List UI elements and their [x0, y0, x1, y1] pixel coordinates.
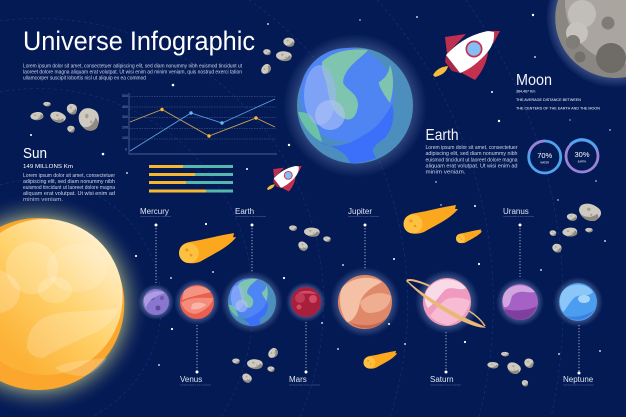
rocket: small: [267, 166, 302, 192]
planet labels: Mars: [289, 375, 307, 384]
intro text: laoreet dolore magna aliquam erat volutpat. Ut wisi enim ad minim veniam, quis nostrud exerci tation: [23, 70, 242, 76]
connector lines: [156, 225, 579, 373]
rocket: large: [433, 31, 500, 80]
intro text: Lorem ipsum dolor sit amet, consectetuer adipiscing elit, sed diam nonummy nibh euismod tincidunt ut: [23, 64, 243, 70]
sun text: aliquam erat volutpat. Ut wisi enim ad: [23, 191, 115, 197]
sun text: Sun: [23, 146, 47, 162]
earth text: Lorem ipsum dolor sit amet, consectetuer: [426, 145, 518, 151]
title: Universe Infographic: [23, 26, 255, 56]
earth text: minim veniam.: [426, 170, 466, 176]
planet labels: Jupiter: [348, 207, 372, 216]
planet: mercury: [138, 284, 174, 320]
planet labels: Lorem ipsum dolor sit amet, consectetuer: [140, 215, 171, 218]
planet labels: Venus: [180, 375, 202, 384]
planet labels: Uranus: [503, 207, 529, 216]
moon text: THE AVERAGE DISTANCE BETWEEN: [516, 98, 581, 102]
earth text: euismod tincidunt ut laoreet dolore magna: [426, 158, 518, 164]
planet: venus: [174, 279, 220, 325]
planet labels: Mercury: [140, 207, 169, 216]
donut: 30 percent earth: [566, 140, 598, 172]
earth text: Earth: [426, 127, 458, 144]
planet labels: Neptune: [563, 375, 594, 384]
planet: jupiter: [330, 267, 400, 337]
asteroids: upper right: [550, 201, 604, 253]
planet: neptune: [553, 277, 603, 327]
earth text: adipiscing elit, sed diam nonummy nibh: [426, 151, 518, 157]
line chart: 200: [122, 126, 128, 130]
planet labels: Lorem ipsum dolor sit amet, consectetuer: [430, 384, 461, 386]
sun text: adipiscing elit, sed diam nonummy nibh: [23, 179, 115, 185]
planet labels: Saturn: [430, 375, 454, 384]
asteroids: middle: [289, 225, 331, 252]
asteroids: lower right: [487, 352, 534, 386]
planet: mars: [286, 282, 326, 322]
donut: 30 percent earth: EARTH: [578, 160, 586, 164]
earth text: [426, 127, 518, 176]
line chart: 0: [125, 148, 127, 152]
earth text: aliquam erat volutpat. Ut wisi enim ad: [426, 164, 518, 170]
sun text: Lorem ipsum dolor sit amet, consectetuer: [23, 173, 115, 179]
planet labels: Earth: [235, 207, 254, 216]
moon text: Moon: [516, 72, 552, 89]
donut: 70 percent water: [529, 141, 561, 173]
asteroids: lower middle: [232, 346, 279, 384]
bar chart: [149, 165, 233, 192]
intro text: ullamcorper suscipit lobortis nisl ut aliquip ex ea commod: [23, 76, 146, 82]
donut: 70 percent water: WATER: [540, 162, 549, 164]
donut: 70 percent water: 70%: [537, 151, 553, 160]
moon text: 384,467 Km: [516, 90, 535, 94]
asteroids: left: [29, 102, 99, 133]
sun text: minim veniam.: [23, 197, 63, 203]
planet: uranus: [496, 278, 544, 326]
line chart: [122, 93, 277, 154]
asteroids: top: [260, 38, 294, 76]
sun text: euismod tincidunt ut laoreet dolore magna: [23, 185, 115, 191]
planet labels: Lorem ipsum dolor sit amet, consectetuer: [180, 384, 211, 386]
big earth: [283, 34, 427, 178]
planet labels: Lorem ipsum dolor sit amet, consectetuer: [563, 384, 594, 386]
planet labels: Lorem ipsum dolor sit amet, consectetuer: [503, 215, 534, 218]
moon text: THE CENTERS OF THE EARTH AND THE MOON: [516, 106, 600, 110]
planet labels: Lorem ipsum dolor sit amet, consectetuer: [348, 215, 379, 218]
planet labels: Lorem ipsum dolor sit amet, consectetuer: [235, 215, 266, 218]
planet: saturn: [407, 270, 485, 334]
moon: [547, 0, 626, 88]
line chart: 400: [122, 105, 128, 109]
line chart: 500: [122, 94, 128, 98]
planet labels: Lorem ipsum dolor sit amet, consectetuer: [289, 384, 320, 386]
donut: 30 percent earth: 30%: [574, 150, 590, 159]
line chart: 100: [122, 136, 128, 140]
sun: [0, 192, 151, 416]
intro text: [23, 64, 243, 82]
sun text: 149 MILLONS Km: [23, 164, 73, 170]
planet: earth: [221, 271, 283, 333]
moon text: [516, 72, 600, 110]
sun text: [23, 146, 115, 203]
planet labels: [140, 207, 594, 386]
comets: [179, 205, 482, 369]
line chart: 300: [122, 115, 128, 119]
